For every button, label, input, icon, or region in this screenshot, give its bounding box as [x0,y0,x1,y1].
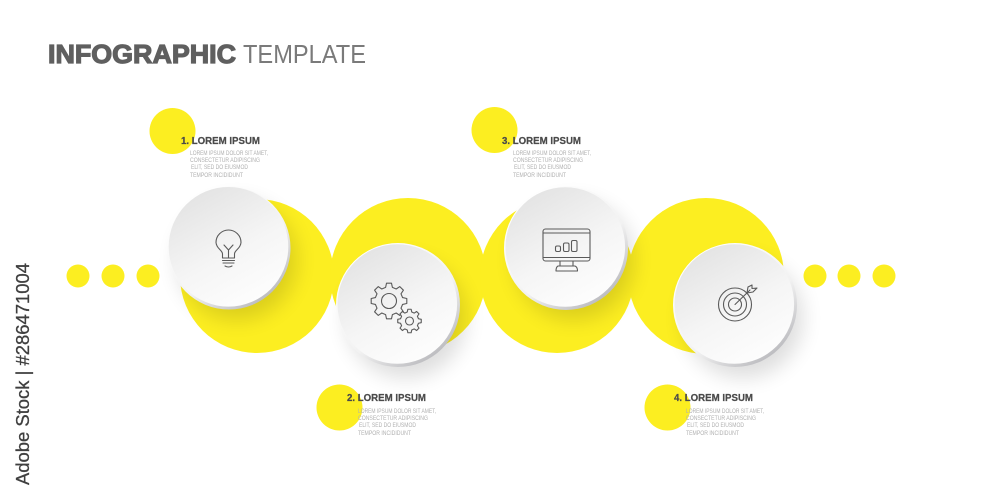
step 2 label: CONSECTETUR ADIPISCING [358,416,428,422]
step 2 label [316,384,436,437]
step 2 label: LOREM IPSUM DOLOR SIT AMET, [358,409,436,415]
step 1 label: CONSECTETUR ADIPISCING [190,158,260,164]
dots: left [66,264,160,288]
disc 1: light bulb [168,186,297,320]
step 1 label: ELIT, SED DO EIUSMOD [191,165,249,171]
title: INFOGRAPHIC [48,39,236,69]
disc 3: monitor chart [504,186,634,320]
icon: gears [371,283,421,333]
yellow chain of circles [180,198,784,354]
step 3 label [472,107,591,179]
dots: right [804,264,896,288]
step 4 label [644,384,764,437]
vertical credit: Adobe Stock | #286471004 [12,263,33,485]
icon: target with arrow [718,285,757,321]
title: TEMPLATE [243,39,366,69]
step 2 label: ELIT, SED DO EIUSMOD [359,423,417,429]
step 1 label: TEMPOR INCIDIDUNT [190,173,243,179]
icon: light bulb [216,230,241,267]
step 1 label: 1. LOREM IPSUM [181,135,260,147]
icon: monitor [543,229,590,271]
step 4 label: 4. LOREM IPSUM [674,392,753,404]
step 3 label: CONSECTETUR ADIPISCING [513,158,583,164]
step 1 label: LOREM IPSUM DOLOR SIT AMET, [190,151,268,157]
disc 2: gears [336,243,466,378]
step 4 label: LOREM IPSUM DOLOR SIT AMET, [686,409,764,415]
step 3 label: LOREM IPSUM DOLOR SIT AMET, [513,151,591,157]
step 3 label: 3. LOREM IPSUM [502,135,581,147]
step 4 label: TEMPOR INCIDIDUNT [686,431,739,437]
step 2 label: TEMPOR INCIDIDUNT [358,431,411,437]
step 2 label: 2. LOREM IPSUM [347,392,426,404]
step 4 label: CONSECTETUR ADIPISCING [686,416,756,422]
step 3 label: TEMPOR INCIDIDUNT [513,173,566,179]
step 3 label: ELIT, SED DO EIUSMOD [514,165,572,171]
step 4 label: ELIT, SED DO EIUSMOD [687,423,745,429]
disc 4: target [673,243,803,378]
step 1 label [150,108,268,179]
title [48,39,366,69]
